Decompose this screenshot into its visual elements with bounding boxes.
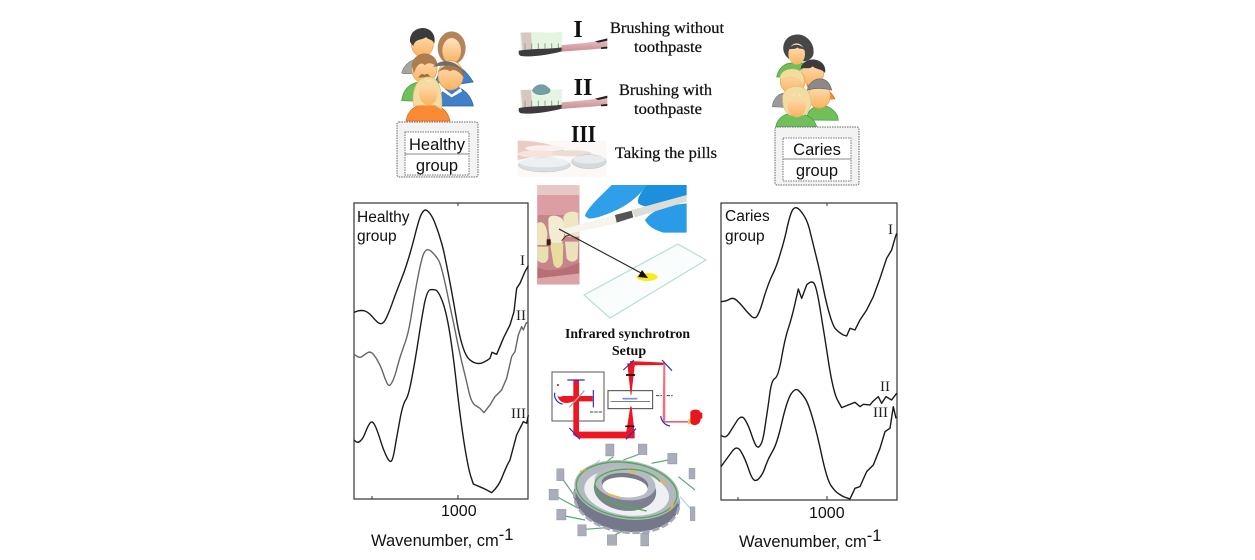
text: numeral III: III [571,122,596,148]
label box: caries group: group [796,162,838,180]
icon: healthy group people [402,28,473,121]
axis labels [371,503,513,550]
text: numeral I: I [573,17,583,43]
arrow: sample to slide [559,229,648,278]
axis labels [739,505,881,551]
chart title: Caries [725,208,770,225]
label box: caries group: Caries [793,141,841,159]
microscope slide with yellow sample [584,244,706,318]
chart: caries group spectra: group [725,228,765,245]
text: brushing with toothpaste: toothpaste [634,101,702,118]
label box: caries group [775,127,859,185]
curve labels: II [516,308,526,324]
label box: healthy group: group [416,157,458,175]
curve labels [873,222,893,421]
icon: pills [518,141,607,177]
icon: toothbrush I [519,32,607,56]
axis labels: 1000 [441,503,477,520]
text: brushing with toothpaste: Brushing with [619,82,712,99]
curve labels: I [888,222,893,238]
curve labels: III [873,405,888,421]
text: brushing without toothpaste [610,20,725,56]
photo: gloved hand with scaler [560,185,687,233]
axis labels: Wavenumber, cm [371,532,499,550]
axis labels: -1 [499,526,513,544]
chart title: Healthy [357,209,410,226]
icon: toothbrush II with toothpaste [519,85,607,114]
chart: healthy group spectra: group [357,228,397,245]
label box: healthy group [397,122,478,177]
axis labels: -1 [867,527,881,545]
label box: healthy group: Healthy [409,136,466,154]
text: numeral II: II [574,75,592,101]
chart frame [354,203,528,499]
spectra curves [354,210,528,493]
icon: caries group people [772,35,838,127]
spectra curves [721,208,897,499]
curve labels: II [880,379,890,395]
photo: teeth [537,185,579,284]
heading: infrared synchrotron setup [565,327,690,359]
optical setup diagram [552,360,702,439]
synchrotron storage ring [549,444,695,546]
chart: healthy group spectra [354,203,528,550]
text: brushing without toothpaste: toothpaste [634,39,702,56]
chart frame [721,203,897,500]
heading: infrared synchrotron setup: Infrared synchrotron [565,327,690,342]
curve labels: I [520,253,525,269]
text: taking the pills: Taking the pills [615,145,717,162]
axis labels: 1000 [809,505,845,522]
curve labels: III [511,406,526,422]
text: brushing without toothpaste: Brushing without [610,20,725,37]
axis labels: Wavenumber, cm [739,533,867,551]
curve labels [511,253,526,422]
chart: caries group spectra [721,203,897,551]
heading: infrared synchrotron setup: Setup [612,344,646,359]
text: brushing with toothpaste [619,82,712,118]
